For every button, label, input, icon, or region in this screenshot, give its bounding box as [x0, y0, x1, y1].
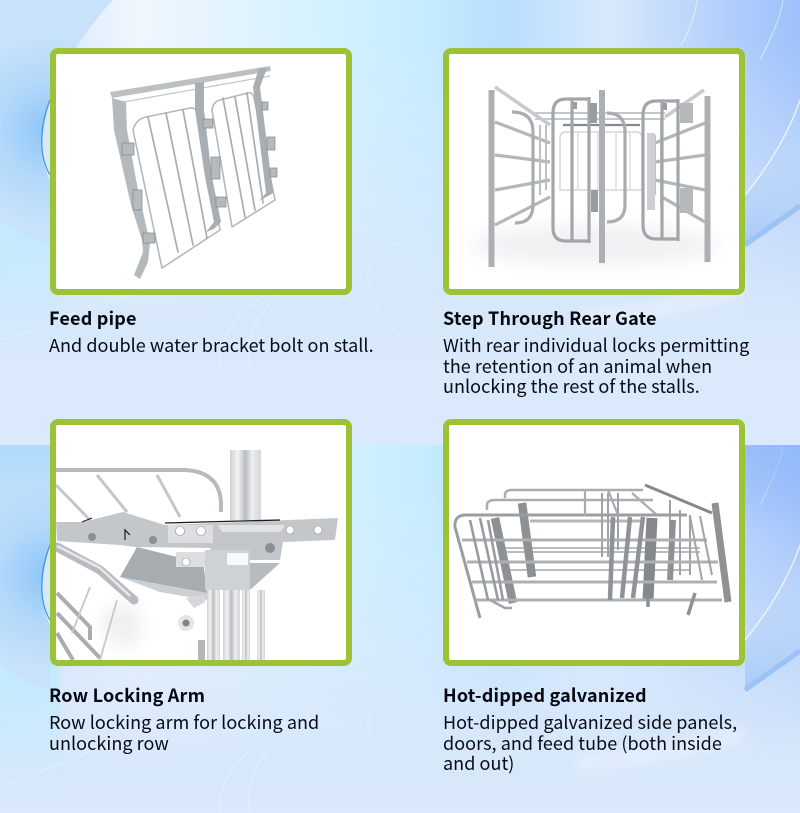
text: row locking arm description	[49, 709, 319, 756]
illustration: locking arm close-up	[56, 450, 338, 660]
panel: feed pipe photo	[50, 48, 352, 295]
heading: row locking arm: Row Locking Arm	[49, 682, 205, 708]
text: row locking arm description: Row locking arm for locking and	[49, 709, 319, 735]
panel: hot-dipped galvanized photo	[443, 419, 745, 666]
text: feed pipe description: And double water bracket bolt on stall.	[49, 332, 374, 358]
illustration: rear gates	[492, 87, 708, 267]
caption: step through rear gate	[443, 305, 749, 399]
illustration: galvanized stall frame	[455, 485, 728, 618]
text: galvanized description	[443, 709, 737, 776]
text: row locking arm description: unlocking row	[49, 730, 169, 756]
caption: hot-dipped galvanized	[443, 682, 737, 776]
illustration: feed pipe gates	[110, 66, 277, 279]
panel: step through rear gate photo	[443, 48, 745, 295]
panel: row locking arm photo	[50, 419, 352, 666]
text: rear gate description: unlocking the rest of the stalls.	[443, 373, 700, 399]
text: rear gate description: the retention of an animal when	[443, 353, 712, 379]
heading: hot-dipped galvanized: Hot-dipped galvanized	[443, 682, 647, 708]
text: rear gate description: With rear individual locks permitting	[443, 332, 749, 358]
heading: feed pipe: Feed pipe	[49, 305, 137, 331]
text: rear gate description	[443, 332, 749, 399]
text: galvanized description: Hot-dipped galvanized side panels,	[443, 709, 737, 735]
text: galvanized description: and out)	[443, 750, 514, 776]
caption: feed pipe	[49, 305, 374, 358]
heading: step through rear gate: Step Through Rear Gate	[443, 305, 657, 331]
text: galvanized description: doors, and feed tube (both inside	[443, 730, 722, 756]
caption: row locking arm	[49, 682, 319, 756]
floor shadow	[470, 225, 720, 265]
